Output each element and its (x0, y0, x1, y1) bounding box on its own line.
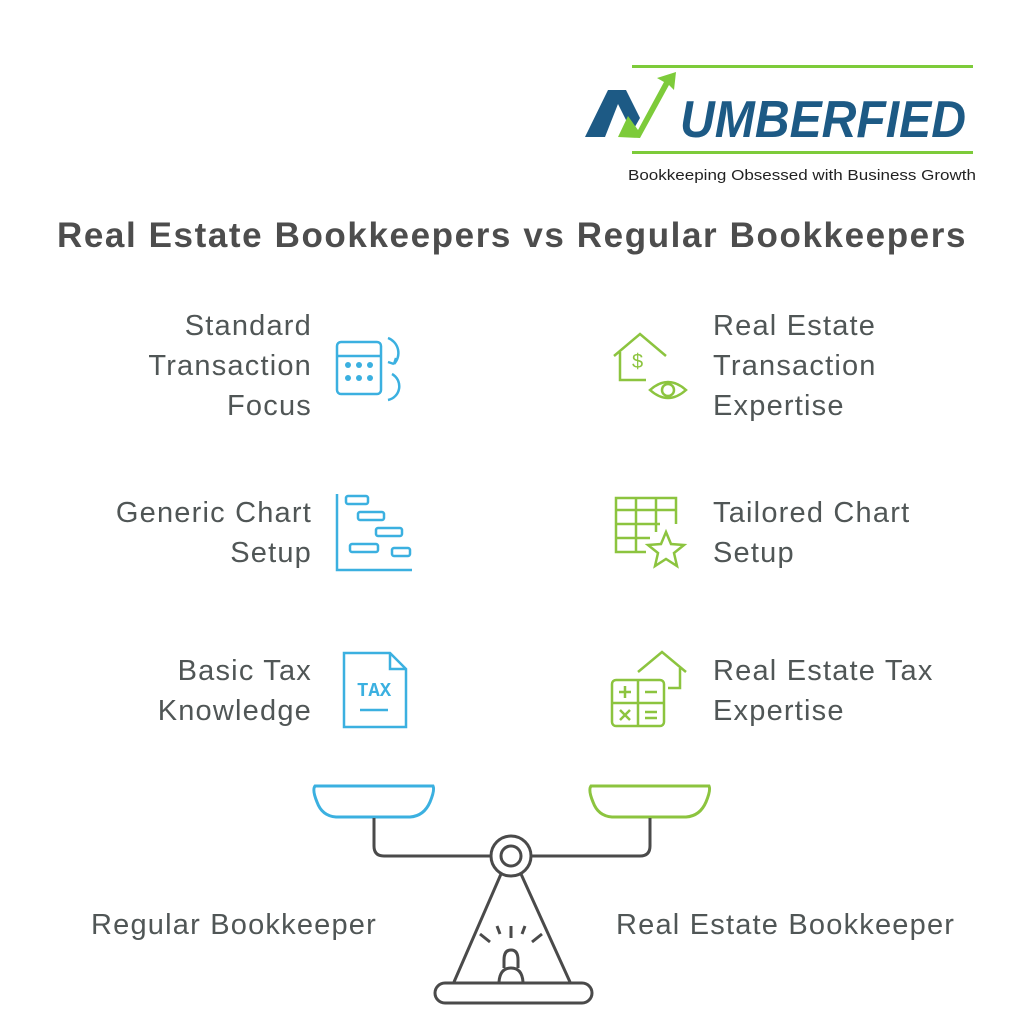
text: basic tax knowledge (158, 655, 312, 727)
icon: calculator cycle (336, 336, 400, 402)
icon: tax document: TAX (357, 680, 392, 702)
text: real estate transaction expertise: Expertise (713, 390, 845, 422)
logo: UMBERFIED (680, 91, 966, 149)
icon: gantt chart (336, 494, 412, 572)
label: real estate bookkeeper: Real Estate Bookkeeper (616, 909, 955, 941)
scale illustration (312, 784, 712, 1004)
text: standard transaction focus: Transaction (148, 350, 312, 382)
text: standard transaction focus: Standard (185, 310, 312, 342)
text: standard transaction focus (148, 310, 312, 422)
logo: Bookkeeping Obsessed with Business Growth (628, 167, 976, 184)
text: generic chart setup (116, 497, 312, 569)
text: real estate transaction expertise (713, 310, 877, 422)
text: real estate tax expertise: Real Estate Tax (713, 655, 934, 687)
icon: house dollar eye (613, 332, 688, 400)
text: real estate transaction expertise: Transaction (713, 350, 877, 382)
text: real estate tax expertise: Expertise (713, 695, 845, 727)
label: regular bookkeeper: Regular Bookkeeper (91, 909, 377, 941)
text: basic tax knowledge: Knowledge (158, 695, 312, 727)
text: generic chart setup: Generic Chart (116, 497, 312, 529)
icon: table star (614, 496, 688, 569)
icon: tax document (342, 652, 408, 728)
text: tailored chart setup: Setup (713, 537, 795, 569)
text: tailored chart setup: Tailored Chart (713, 497, 910, 529)
logo (585, 65, 976, 184)
icon: calculator house (610, 650, 687, 728)
text: real estate tax expertise (713, 655, 934, 727)
text: real estate transaction expertise: Real Estate (713, 310, 876, 342)
text: basic tax knowledge: Basic Tax (178, 655, 312, 687)
text: tailored chart setup (713, 497, 910, 569)
right pan (590, 786, 710, 817)
title: Real Estate Bookkeepers vs Regular Bookkeepers (57, 216, 967, 255)
left pan (314, 786, 434, 817)
text: generic chart setup: Setup (230, 537, 312, 569)
text: standard transaction focus: Focus (227, 390, 312, 422)
icon: house dollar eye: $ (632, 351, 643, 373)
